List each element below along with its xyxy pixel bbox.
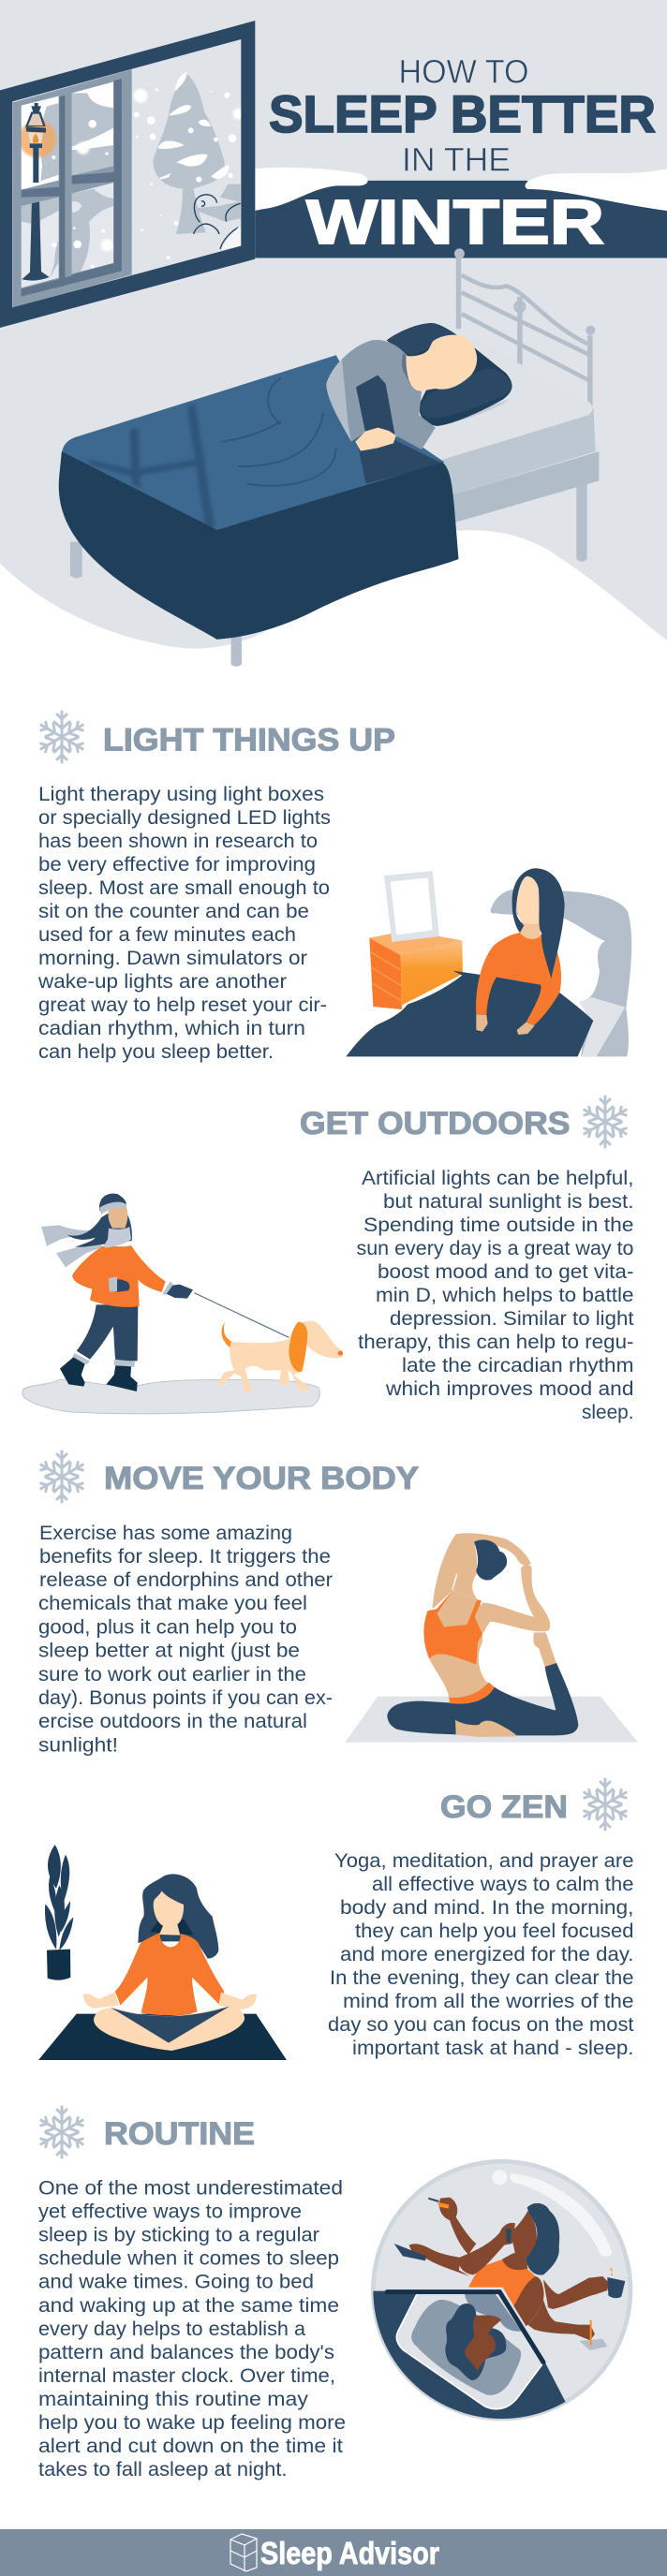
hair [67, 1213, 132, 1247]
text: regular schedule: yet effective ways to improve [38, 2201, 302, 2223]
icon: mattress logo [230, 2534, 257, 2571]
sweater [326, 340, 436, 449]
icon: snowflake [37, 712, 86, 762]
scarf [104, 1227, 131, 1248]
text: yoga and meditation [328, 1849, 634, 2059]
text: light therapy: sit on the counter and can be [38, 900, 309, 922]
text: regular schedule: sleep is by sticking to a regular [38, 2224, 319, 2246]
bubble [373, 2161, 630, 2419]
text: natural sunlight: Artificial lights can be helpful, [362, 1167, 633, 1189]
neck [520, 921, 541, 939]
text: exercise: release of endorphins and other [39, 1568, 333, 1591]
title line: in the: IN THE [402, 142, 511, 178]
bent arm [479, 1565, 550, 1634]
title line: sleep better: SLEEP BETTER [269, 84, 656, 143]
text: natural sunlight: which improves mood and [385, 1377, 633, 1400]
text: light therapy: wake-up lights are another [37, 970, 287, 993]
heading: go zen: GO ZEN [440, 1789, 568, 1825]
boot cuffs [72, 1353, 135, 1367]
note pad [579, 2339, 607, 2350]
torso [428, 1590, 492, 1701]
hat [99, 1194, 126, 1211]
text: light therapy: can help you sleep better. [38, 1040, 274, 1063]
street lamp [19, 103, 56, 281]
blanket front drop [59, 451, 459, 640]
text: light therapy: has been shown in research to [38, 830, 318, 852]
steam [611, 2268, 612, 2275]
light box glow [391, 877, 433, 935]
raised arm [433, 1533, 531, 1609]
text: exercise: day). Bonus points if you can ex- [38, 1686, 333, 1709]
legs [94, 2007, 245, 2051]
section: move your body [37, 1451, 638, 1757]
headboard finials [454, 248, 595, 335]
hair on pillow [445, 2304, 506, 2380]
section: get outdoors [22, 1097, 634, 1423]
logo text: Sleep Advisor [260, 2537, 439, 2571]
hat band [100, 1202, 126, 1214]
text: exercise: chemicals that make you feel [38, 1592, 307, 1614]
title line: winter: WINTER [306, 187, 604, 258]
pants [77, 1304, 138, 1361]
torso [468, 2255, 536, 2306]
phone [506, 2228, 511, 2243]
plant [45, 1845, 73, 1980]
face and neck [154, 1891, 184, 1936]
text: yoga and meditation: they can help you feel focused [355, 1920, 633, 1942]
icon: snowflake [581, 1779, 630, 1830]
hair [526, 2203, 559, 2275]
text: exercise: Exercise has some amazing [39, 1522, 292, 1544]
head and neck [452, 1545, 478, 1599]
legs on pillow [465, 2315, 501, 2371]
text: regular schedule [38, 2177, 346, 2480]
headboard [459, 258, 590, 406]
text: yoga and meditation: body and mind. In the morning, [340, 1896, 633, 1919]
tree snow [157, 72, 229, 180]
text: light therapy: be very effective for improving [38, 853, 316, 876]
text: light therapy [37, 783, 331, 1063]
leggings [387, 1663, 578, 1735]
text: natural sunlight: sleep. [582, 1401, 633, 1423]
falling snow [52, 88, 245, 269]
glass and winter scene [12, 39, 245, 307]
head [406, 335, 477, 390]
text: light therapy: Light therapy using light boxes [38, 783, 324, 805]
waistband [449, 1683, 495, 1704]
text: regular schedule: every day helps to establish a [38, 2318, 305, 2340]
mitten [115, 1279, 129, 1292]
footer bar [0, 2529, 667, 2576]
mattress [579, 997, 625, 1056]
text: yoga and meditation: Yoga, meditation, and prayer are [334, 1849, 633, 1872]
text: exercise: ercise outdoors in the natural [38, 1710, 307, 1732]
text: natural sunlight: late the circadian rhythm [402, 1354, 633, 1376]
mattress [453, 451, 599, 523]
text: regular schedule: One of the most underestimated [38, 2177, 343, 2200]
blanket top [62, 355, 445, 530]
heading: routine: ROUTINE [104, 2116, 255, 2152]
hands [476, 1014, 535, 1035]
text: exercise: sunlight! [38, 1734, 118, 1757]
heading: light things up: LIGHT THINGS UP [103, 723, 395, 758]
sports top [423, 1590, 482, 1664]
pillow [387, 323, 512, 426]
text: yoga and meditation: important task at hand - sleep. [352, 2037, 633, 2059]
mat [38, 2014, 287, 2060]
heading: get outdoors: GET OUTDOORS [300, 1106, 570, 1141]
tree outside [153, 72, 225, 234]
foot and shin [533, 1632, 556, 1667]
text: exercise: sure to work out earlier in the [38, 1663, 306, 1685]
text: natural sunlight: depression. Similar to light [390, 1307, 634, 1330]
text: natural sunlight: min D, which helps to battle [376, 1284, 633, 1306]
text: light therapy: cadian rhythm, which in turn [38, 1017, 305, 1039]
text: regular schedule: help you to wake up feeling more [38, 2411, 346, 2434]
pencil [588, 2320, 594, 2345]
text: natural sunlight: therapy, this can help to regu- [358, 1331, 633, 1353]
blanket folds [221, 378, 336, 486]
icon: snowflake [581, 1097, 630, 1147]
marker and pad [428, 2199, 438, 2201]
outer frame [0, 21, 255, 328]
skirt [465, 2293, 522, 2332]
icon: snowflake [37, 1451, 86, 1502]
text: light therapy: used for a few minutes each [38, 923, 296, 946]
text: regular schedule: and wake times. Going to bed [38, 2271, 314, 2293]
bed legs [70, 478, 587, 667]
illustration: multitasking woman in bubble [368, 2161, 630, 2428]
pillow [411, 2300, 521, 2395]
text: light therapy: or specially designed LED lights [38, 806, 331, 829]
text: light therapy: great way to help reset your cir- [38, 994, 327, 1016]
chest [502, 2253, 527, 2270]
illustration: yoga pose [345, 1533, 638, 1743]
neck shadow [402, 353, 422, 391]
illustration: meditating woman [38, 1845, 287, 2060]
bench [190, 184, 241, 250]
text: regular schedule: pattern and balances the body's [38, 2341, 334, 2363]
sweater [72, 1245, 166, 1307]
text: regular schedule: alert and cut down on the time it [38, 2435, 343, 2457]
hands [83, 1993, 257, 2009]
arms [409, 2198, 609, 2340]
illustration: woman walking dog [22, 1194, 344, 1414]
arm shadow [356, 375, 395, 435]
text: yoga and meditation: day so you can focus on the most [328, 2013, 634, 2036]
icon: snowflake [37, 2107, 86, 2157]
leash hand glove [166, 1285, 193, 1299]
headboard [490, 890, 631, 1056]
hair [138, 1874, 218, 1959]
sweater [115, 1933, 224, 2015]
sleeper [326, 323, 512, 451]
title line: how to: HOW TO [399, 54, 528, 90]
section: routine [37, 2107, 630, 2480]
text: natural sunlight: but natural sunlight is best. [383, 1190, 633, 1213]
text: exercise: good, plus it can help you to [38, 1616, 297, 1639]
sweater and arms [476, 933, 561, 1025]
section: go zen [38, 1779, 634, 2060]
text: yoga and meditation: mind from all the worries of the [343, 1990, 633, 2012]
window sash [13, 69, 132, 307]
text: yoga and meditation: and more energized for the day. [340, 1943, 633, 1965]
heading: move your body: MOVE YOUR BODY [104, 1461, 419, 1496]
text: exercise [38, 1522, 333, 1757]
text: yoga and meditation: In the evening, they can clear the [330, 1966, 633, 1989]
mitten cuff [109, 1276, 117, 1291]
face [517, 876, 541, 924]
text: regular schedule: maintaining this routine may [38, 2388, 308, 2410]
window [0, 21, 255, 328]
text: exercise: sleep better at night (just be [38, 1639, 300, 1661]
text: regular schedule: schedule when it comes to sleep [38, 2247, 339, 2270]
leash [194, 1293, 289, 1337]
text: exercise: benefits for sleep. It triggers the [39, 1545, 331, 1568]
title [269, 54, 656, 258]
glove cuff [162, 1281, 173, 1295]
bed seen from above [368, 2291, 567, 2428]
text: natural sunlight: sun every day is a great way to [356, 1237, 634, 1259]
dog [217, 1321, 344, 1392]
text: light therapy: sleep. Most are small enough to [38, 876, 330, 899]
illustration: woman with light box in bed [346, 868, 631, 1056]
text: light therapy: morning. Dawn simulators or [38, 947, 307, 969]
hand [355, 428, 396, 451]
sash shadows [22, 79, 122, 297]
scarf tails [41, 1225, 103, 1267]
face [511, 2211, 537, 2258]
bubble highlight arc [510, 2173, 612, 2257]
boots [60, 1357, 138, 1391]
text: regular schedule: takes to fall asleep at night. [38, 2458, 287, 2480]
hair [512, 868, 565, 979]
pillow [471, 913, 605, 1002]
text: regular schedule: internal master clock. Over time, [38, 2364, 335, 2387]
hair [474, 1539, 507, 1581]
text: natural sunlight: Spending time outside in the [363, 1214, 633, 1236]
title band with snow [255, 168, 667, 258]
snowy ground [22, 1379, 319, 1414]
text: natural sunlight: boost mood and to get vita- [378, 1260, 633, 1283]
text: yoga and meditation: all effective ways to calm the [372, 1873, 633, 1895]
bed [59, 248, 599, 667]
orange pad [437, 2202, 449, 2209]
text: regular schedule: and waking up at the same time [38, 2294, 339, 2317]
nightstand [369, 934, 463, 1009]
light box [384, 871, 439, 942]
mug [607, 2277, 625, 2298]
lower foot [455, 1720, 518, 1737]
tablet [394, 2244, 426, 2260]
hair shadow [150, 1920, 194, 1936]
hero wall background [0, 0, 667, 649]
bubble highlight dot [492, 2170, 507, 2185]
headboard line [387, 2292, 543, 2363]
window shadow on blanket [87, 405, 215, 528]
face [108, 1207, 127, 1229]
yoga mat [345, 1697, 638, 1743]
shorts [110, 2007, 230, 2043]
sleeve highlight [326, 359, 351, 442]
text: natural sunlight [356, 1167, 634, 1423]
footer [0, 2529, 667, 2576]
blanket [346, 971, 593, 1056]
section: light things up [37, 712, 631, 1063]
